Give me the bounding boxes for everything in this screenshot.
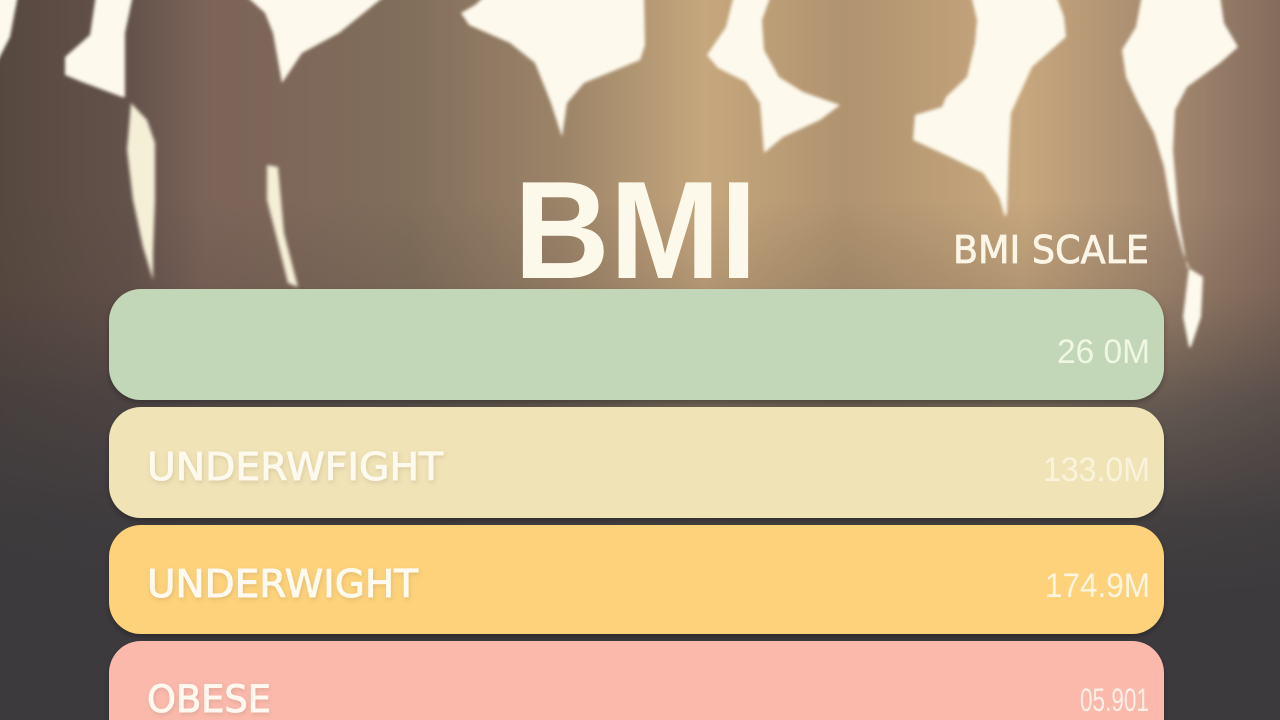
label: underweight, orange row: UNDERWIGHT (147, 562, 419, 606)
label: underweight, pale yellow row: UNDERWFIGHT (147, 445, 444, 489)
value: orange row: 174.9M (1045, 567, 1150, 605)
value: green row: 26 0M (1057, 333, 1150, 371)
bar: pale yellow row (109, 407, 1164, 518)
label: obese: OBESE (147, 678, 271, 720)
bar: obese row (109, 641, 1164, 720)
title: BMI: BMI (514, 153, 757, 308)
bar: green row (109, 289, 1164, 400)
value: pale yellow row: 133.0M (1043, 451, 1150, 489)
value: obese row: 05.901 (1080, 682, 1149, 718)
bar: orange row (109, 525, 1164, 634)
heading: BMI scale: BMI SCALE (953, 228, 1149, 272)
